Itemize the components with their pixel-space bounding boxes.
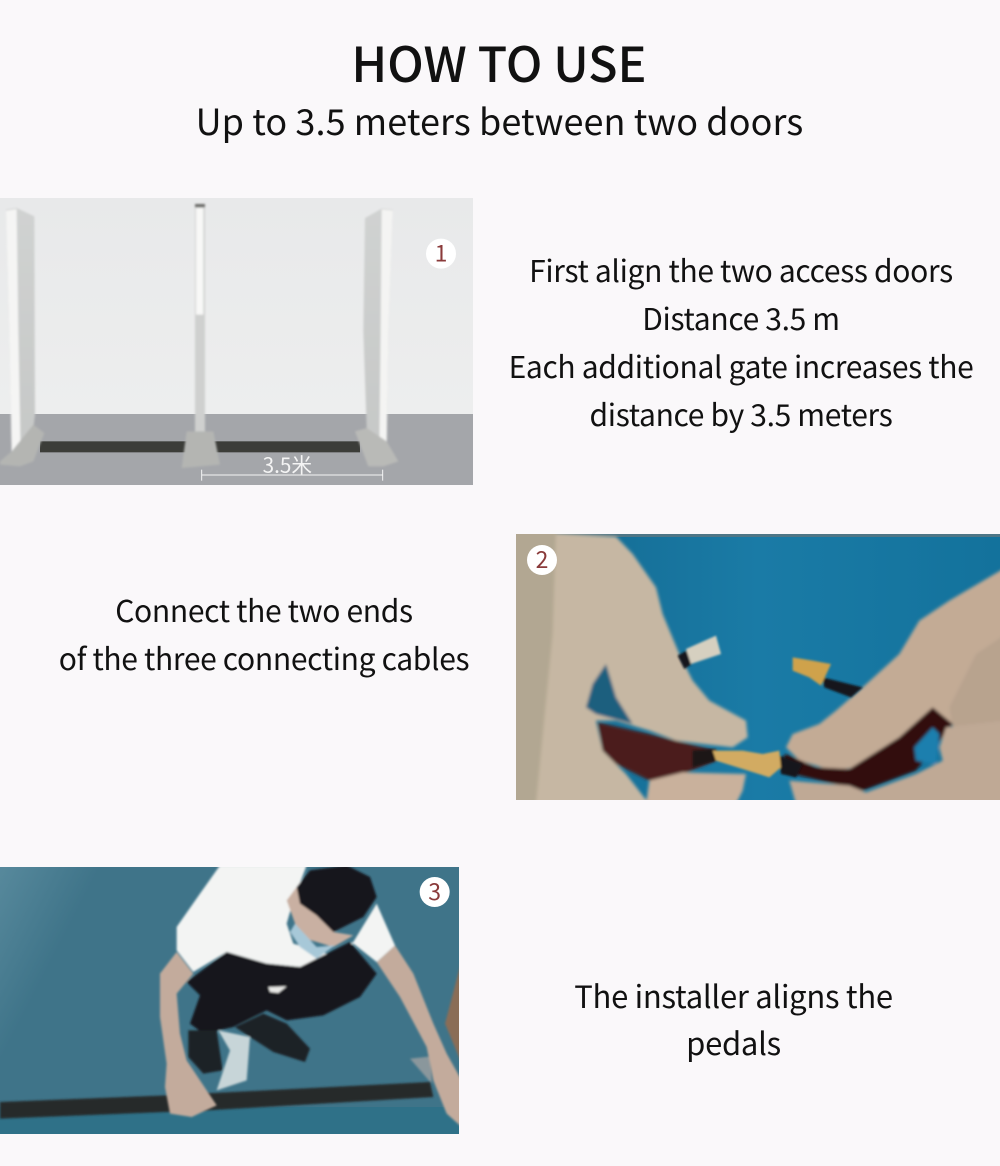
- step badge 3: [420, 873, 450, 907]
- wall: [0, 198, 473, 415]
- gold connector: [793, 657, 863, 697]
- left hand: [513, 531, 748, 804]
- step 2 text: [59, 587, 469, 679]
- step 1 text: Distance 3.5 m: [642, 295, 840, 339]
- step badge 1: [426, 234, 456, 269]
- middle gate: [182, 204, 220, 468]
- step 3 text: The installer aligns the: [574, 972, 893, 1017]
- step badge 2: 2: [536, 541, 548, 575]
- right hand: [786, 567, 1000, 771]
- step 1 text: [509, 247, 973, 435]
- black pedal strip: [0, 1082, 433, 1119]
- left gate: [0, 208, 44, 466]
- dimension line with label: 3.5米: [263, 449, 312, 479]
- photo 1: three gates with 3.5 m spacing: [0, 198, 473, 485]
- step 2 text: of the three connecting cables: [59, 635, 469, 679]
- step 3 text: [574, 972, 893, 1064]
- step 1 text: Each additional gate increases the: [509, 343, 973, 387]
- step badge 2: [527, 541, 557, 575]
- step badge 1: 1: [435, 234, 447, 268]
- brown cable grip: [598, 722, 716, 781]
- crouching man: [160, 865, 462, 1127]
- joined connector: [693, 749, 803, 777]
- step 1 text: distance by 3.5 meters: [590, 391, 892, 435]
- step 2 text: Connect the two ends: [115, 587, 413, 631]
- subtitle: Up to 3.5 meters between two doors: [196, 94, 803, 146]
- step badge 3: 3: [428, 873, 441, 907]
- photo 3: installer aligning pedals: [0, 867, 459, 1134]
- blue table: [516, 534, 1000, 800]
- photo 2: hands joining cable connectors: [516, 534, 1000, 800]
- title: HOW TO USE: [351, 26, 647, 96]
- step 1 text: First align the two access doors: [529, 247, 953, 291]
- brown box and metal plate: [410, 960, 462, 1084]
- right gate: [355, 209, 398, 466]
- black floor rail: [40, 441, 360, 452]
- blue floor: [0, 867, 459, 1134]
- carpet floor: [0, 414, 473, 485]
- step 3 text: pedals: [686, 1019, 781, 1064]
- silver connector: [678, 636, 721, 669]
